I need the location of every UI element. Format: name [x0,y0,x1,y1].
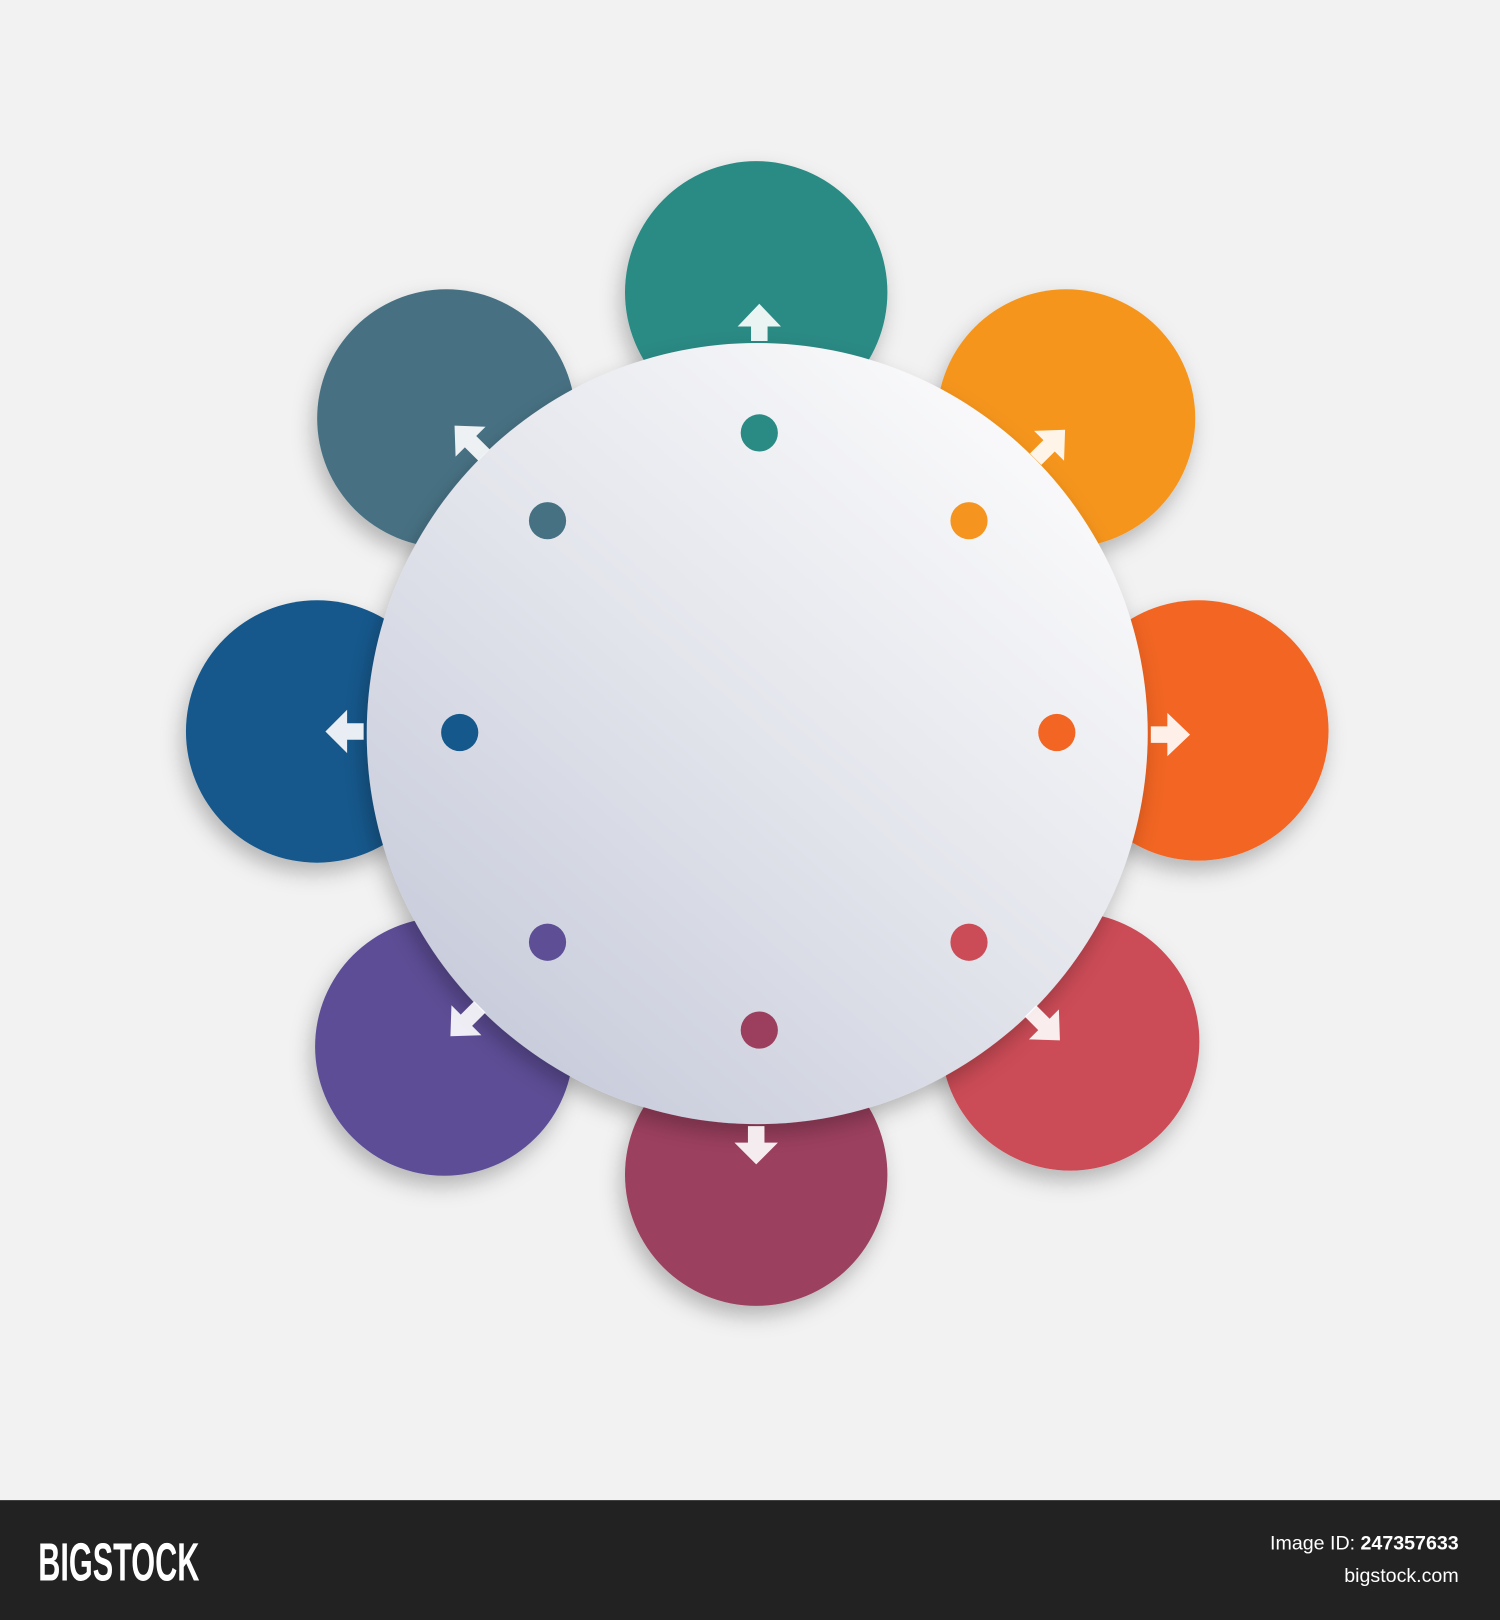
circle: bottom maroon [625,1043,887,1306]
arrow: down-right [1025,1005,1060,1040]
circle: left blue [186,600,448,863]
dots [441,414,1075,1049]
arrow: up-left [455,426,490,461]
arrows [325,304,1190,1164]
satellite circles [186,161,1329,1306]
arrow: right [1151,713,1190,756]
circle: top-left slate [317,289,575,548]
arrow: down [735,1126,778,1164]
footer logo: BIGSTOCK [38,1533,199,1593]
arrow: up [738,304,781,341]
circle: bottom-left purple [315,917,573,1176]
footer image id: Image ID: 247357633 [1270,1533,1459,1555]
center circle [367,343,1148,1124]
circle: bottom-right red [941,912,1199,1171]
footer url: bigstock.com [1344,1565,1459,1587]
circle: top teal [625,161,887,424]
arrow: up-right [1030,430,1065,465]
arrow: down-left [450,1001,486,1036]
circle: right orange-red [1068,600,1329,861]
arrow: left [325,710,364,753]
footer bar [0,1500,1500,1620]
circle: top-right orange [937,289,1195,548]
